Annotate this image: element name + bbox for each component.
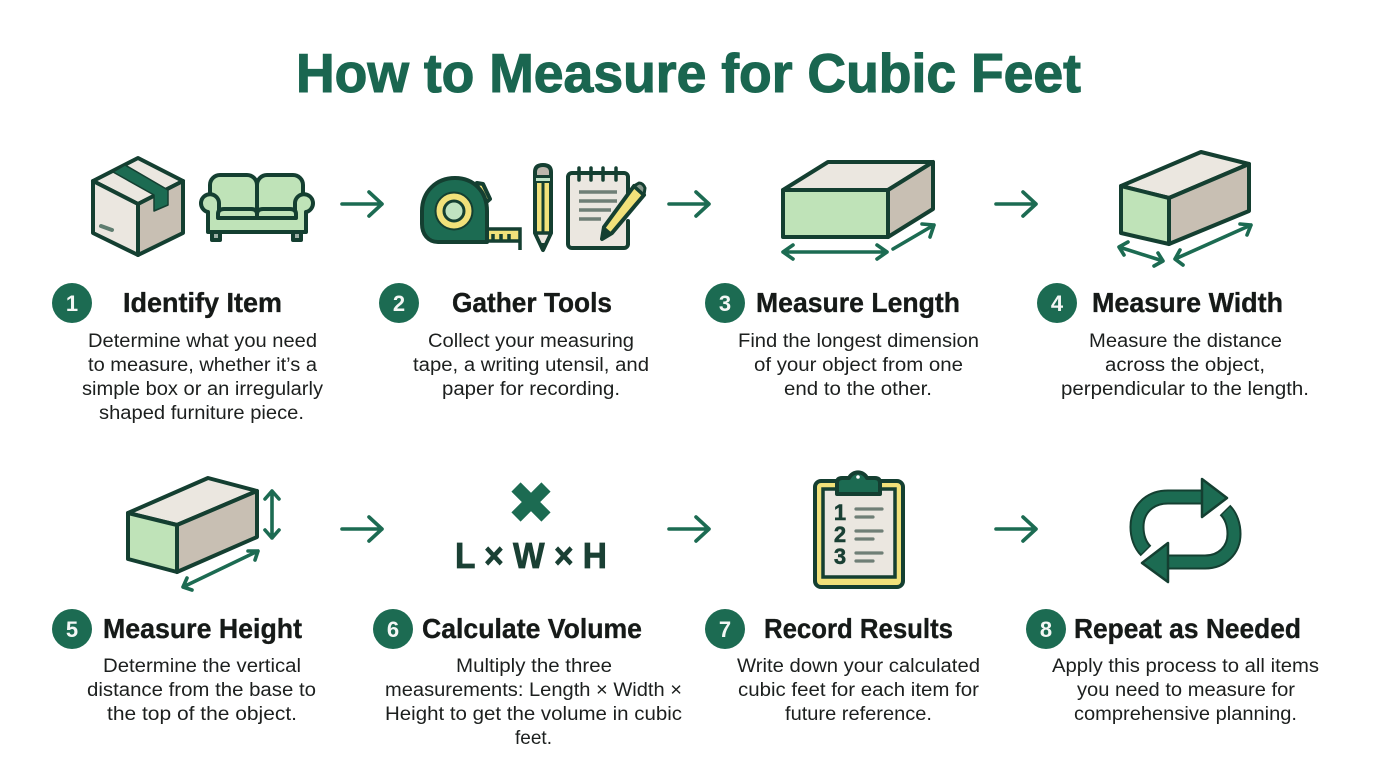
description [87,655,316,725]
description [1052,655,1319,725]
step number 5: 5 [66,617,78,642]
description [738,330,979,400]
icon: sofa [201,175,313,240]
description: feet. [515,727,552,749]
description: paper for recording. [442,378,620,400]
description: cubic feet for each item for [738,679,979,701]
step number 4 [1037,283,1077,323]
panel: step 2 gather tools [379,165,649,400]
description: shaped furniture piece. [99,402,304,424]
step number 1 [52,283,92,323]
heading: Gather Tools [452,287,612,318]
description: Write down your calculated [737,655,980,677]
step number 2 [379,283,419,323]
description [82,330,323,424]
description [737,655,980,725]
icon: box with length arrows [783,162,934,259]
icon: repeat arrows [1137,479,1234,582]
heading: Calculate Volume [422,613,642,644]
formula: L × W × H [455,535,607,576]
arrow: step 3 to 4 [996,192,1036,216]
arrow: step 2 to 3 [669,192,709,216]
step number 6: 6 [387,617,399,642]
heading: Measure Length [756,287,960,318]
step number 8 [1026,609,1066,649]
icon: clipboard checklist: 1 [834,500,846,525]
icon: clipboard checklist: 2 [834,522,846,547]
icon: pencil [535,165,551,250]
step number 5 [52,609,92,649]
description: simple box or an irregularly [82,378,323,400]
step number 4: 4 [1051,291,1064,316]
description: future reference. [785,703,932,725]
description: Determine what you need [88,330,317,352]
icon: box with width arrows [1119,152,1251,266]
step number 2: 2 [393,291,405,316]
arrow: step 1 to 2 [342,192,382,216]
panel: step 1 identify item [52,158,323,424]
panel: step 8 repeat as needed [1026,479,1319,725]
icon: tape measure [422,178,520,250]
arrow: step 7 to 8 [996,517,1036,541]
panel: step 3 measure length [705,162,979,400]
step number 6 [373,609,413,649]
step number 1: 1 [66,291,78,316]
step number 7 [705,609,745,649]
panel: step 4 measure width [1037,152,1309,400]
icon: box with height arrows [128,478,279,590]
panel: step 5 measure height [52,478,316,725]
icon: notepad with pencil [568,168,645,248]
step number 7: 7 [719,617,731,642]
heading: Record Results [764,613,953,644]
panel: step 7 record results [705,472,980,725]
description: Multiply the three [456,655,612,677]
heading: Measure Height [103,613,302,644]
step number 8: 8 [1040,617,1052,642]
panel: step 6 calculate volume [373,487,682,749]
icon: multiply cross [516,487,546,517]
description: Collect your measuring [428,330,634,352]
description: tape, a writing utensil, and [413,354,649,376]
step number 3 [705,283,745,323]
description: Height to get the volume in cubic [385,703,682,725]
description: comprehensive planning. [1074,703,1297,725]
description: Find the longest dimension [738,330,979,352]
description: Measure the distance [1089,330,1282,352]
description: distance from the base to [87,679,316,701]
description: Determine the vertical [103,655,301,677]
step number 3: 3 [719,291,731,316]
description: measurements: Length × Width × [385,679,682,701]
heading: Measure Width [1092,287,1283,318]
description: you need to measure for [1077,679,1295,701]
title: How to Measure for Cubic Feet [296,42,1081,104]
icon: cardboard box [93,158,183,255]
description [413,330,649,400]
description: perpendicular to the length. [1061,378,1309,400]
arrow: step 5 to 6 [342,517,382,541]
description [1061,330,1309,400]
description: end to the other. [784,378,932,400]
description: to measure, whether it’s a [88,354,317,376]
description [385,655,682,749]
heading: Identify Item [123,287,282,318]
description: of your object from one [754,354,963,376]
description: the top of the object. [107,703,297,725]
heading: Repeat as Needed [1074,613,1301,644]
icon: clipboard checklist: 3 [834,544,846,569]
arrow: step 6 to 7 [669,517,709,541]
icon: clipboard checklist [815,472,903,587]
description: Apply this process to all items [1052,655,1319,677]
description: across the object, [1105,354,1265,376]
